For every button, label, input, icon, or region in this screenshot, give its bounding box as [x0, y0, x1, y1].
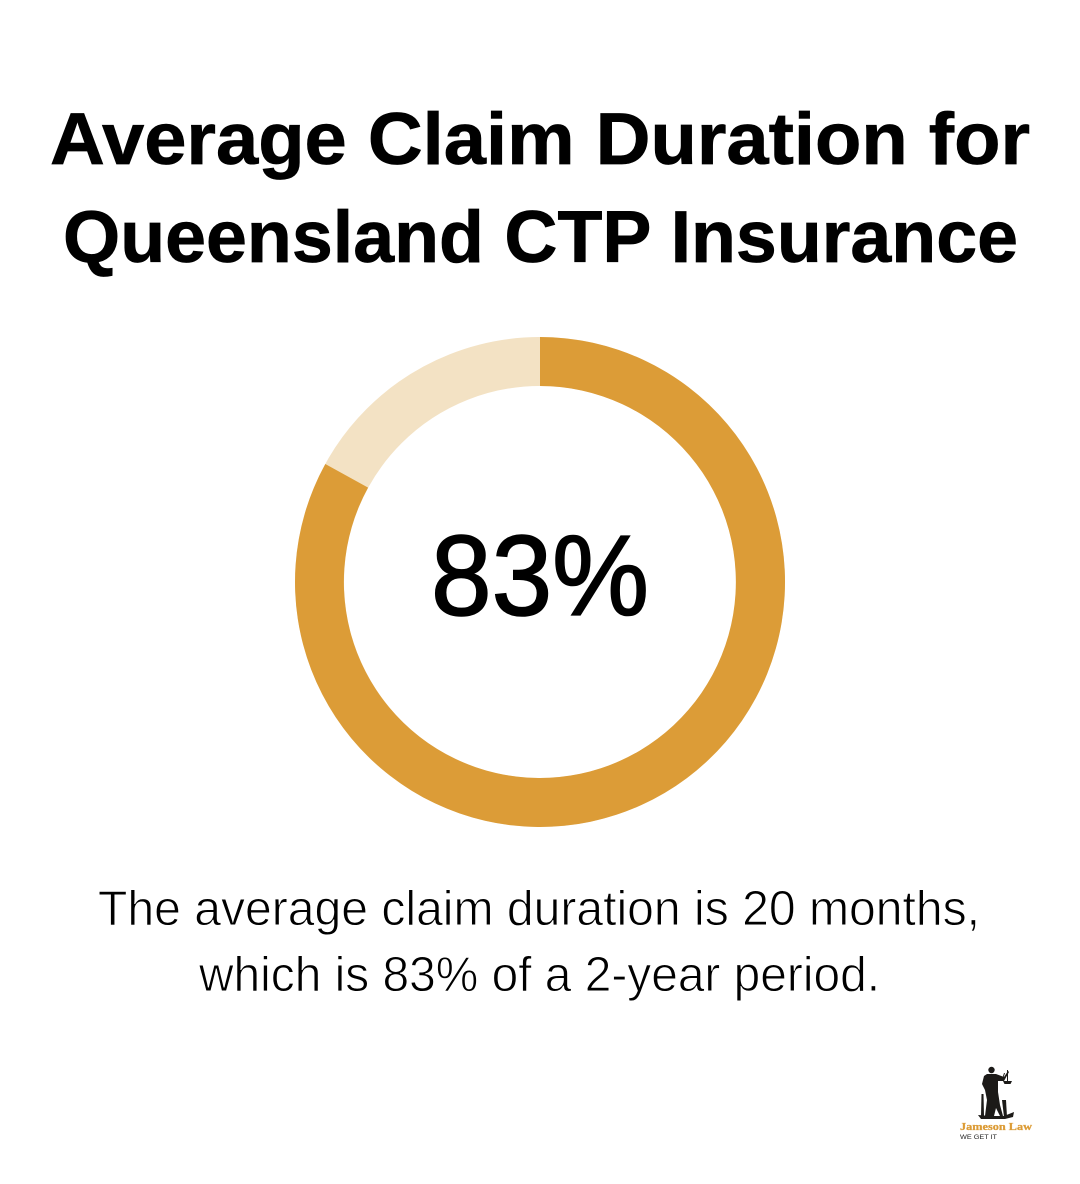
logo tagline: WE GET IT [960, 1134, 997, 1141]
caption text: The average claim duration is 20 months, [98, 882, 980, 936]
logo wordmark: Jameson Law [960, 1121, 1032, 1133]
donut track: remaining 17% [320, 362, 760, 802]
title: Average Claim Duration for [50, 99, 1030, 180]
caption text: which is 83% of a 2-year period. [198, 948, 880, 1002]
title: Queensland CTP Insurance [63, 197, 1018, 278]
logo: Jameson Law [960, 1067, 1032, 1141]
donut value arc: 83% [295, 337, 785, 827]
icon: lady justice [978, 1067, 1014, 1119]
title [50, 99, 1030, 278]
donut chart: 83% [295, 337, 785, 827]
caption text [98, 882, 980, 1002]
donut centre value: 83% [431, 513, 649, 640]
